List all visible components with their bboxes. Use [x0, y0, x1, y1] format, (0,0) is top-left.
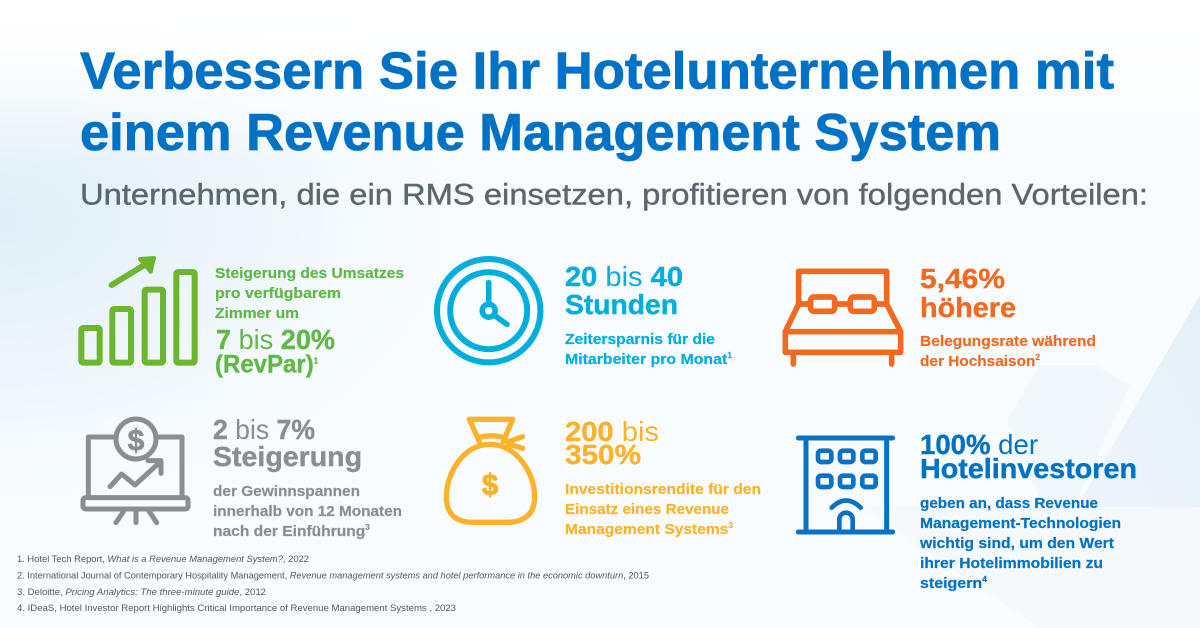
icon: hotel building [798, 438, 893, 532]
icon: presentation screen with coin: $ [128, 424, 145, 457]
text: return on investment: Einsatz eines Revenue [565, 502, 729, 518]
text: profit margins: 3 [365, 523, 371, 532]
text: time savings: Mitarbeiter pro Monat [565, 352, 716, 368]
text: return on investment: 3 [728, 521, 734, 530]
text: occupancy: Belegungsrate während [920, 334, 1096, 350]
text: hotel investors: wichtig sind, um den Wert [919, 536, 1114, 552]
text: RevPAR: Steigerung des Umsatzes [215, 266, 404, 282]
text: time savings: Stunden [565, 289, 678, 320]
text: occupancy [920, 263, 1096, 370]
text: RevPAR [215, 266, 404, 378]
text: profit margins [213, 414, 402, 540]
text: RevPAR: Zimmer um [215, 306, 299, 322]
panel: return on investment [446, 416, 761, 538]
title: einem Revenue Management System [80, 103, 1001, 161]
text: profit margins: 2 bis 7% [213, 414, 315, 445]
panel: occupancy [785, 263, 1096, 370]
text: occupancy: 5,46% [920, 263, 1005, 294]
text: hotel investors: Management-Technologien [920, 516, 1121, 532]
footnotes [17, 554, 649, 613]
text: occupancy: der Hochsaison [920, 354, 1031, 370]
subtitle: Unternehmen, die ein RMS einsetzen, profitieren von folgenden Vorteilen: [80, 178, 1148, 212]
text: occupancy: 2 [1035, 353, 1041, 362]
icon: money bag [446, 419, 535, 522]
text: RevPAR: pro verfügbarem [215, 286, 341, 302]
text: hotel investors: 100% der [920, 429, 1038, 460]
title: Verbessern Sie Ihr Hotelunternehmen mit [80, 42, 1114, 100]
icon: bed [785, 271, 901, 364]
text: time savings: 1 [727, 351, 733, 360]
text: RevPAR: (RevPar) [215, 350, 318, 378]
panel: time savings [437, 259, 733, 368]
text: RevPAR: 7 bis 20% [216, 324, 335, 355]
text: profit margins: nach der Einführung [213, 524, 358, 540]
text: hotel investors: Hotelinvestoren [920, 453, 1137, 484]
panel: hotel investors [798, 429, 1137, 592]
panel: profit margins [83, 414, 402, 540]
text: time savings: 20 bis 40 [565, 261, 683, 292]
icon: money bag: $ [482, 469, 498, 502]
text: profit margins: innerhalb von 12 Monaten [213, 504, 402, 520]
text: time savings: Zeitersparnis für die [565, 332, 715, 348]
text: occupancy: höhere [920, 292, 1016, 323]
text: RevPAR: 1 [314, 356, 319, 366]
text: profit margins: Steigerung [213, 441, 362, 472]
text: return on investment: 200 bis [565, 416, 659, 447]
footnotes: 2. International Journal of Contemporary Hospitality Management, Revenue management systems and hotel performance in the economic downturn, 2015 [17, 570, 649, 580]
text: hotel investors: geben an, dass Revenue [920, 496, 1098, 512]
text: profit margins: der Gewinnspannen [213, 484, 360, 500]
text: return on investment: 350% [565, 439, 641, 470]
title [80, 42, 1114, 161]
text: hotel investors: 4 [982, 575, 988, 584]
icon: clock [437, 259, 540, 362]
text: return on investment: Investitionsrendite für den [565, 482, 761, 498]
text: time savings [565, 261, 733, 368]
icon: bar chart with arrow [81, 258, 195, 363]
text: hotel investors: steigern [920, 576, 978, 592]
footnotes: 3. Deloitte, Pricing Analytics: The three-minute guide , 2012 [17, 587, 266, 597]
text: hotel investors [919, 429, 1137, 592]
footnotes: 4. IDeaS, Hotel Investor Report Highlights Critical Importance of Revenue Management Systems , 2023 [17, 603, 456, 613]
icon: presentation screen with coin [83, 419, 188, 523]
footnotes: 1. Hotel Tech Report, What is a Revenue Management System?, 2022 [17, 554, 309, 564]
text: hotel investors: ihrer Hotelimmobilien zu [920, 556, 1103, 572]
panel: RevPAR [81, 258, 404, 378]
text: return on investment [565, 416, 761, 538]
text: return on investment: Management Systems [565, 522, 720, 538]
